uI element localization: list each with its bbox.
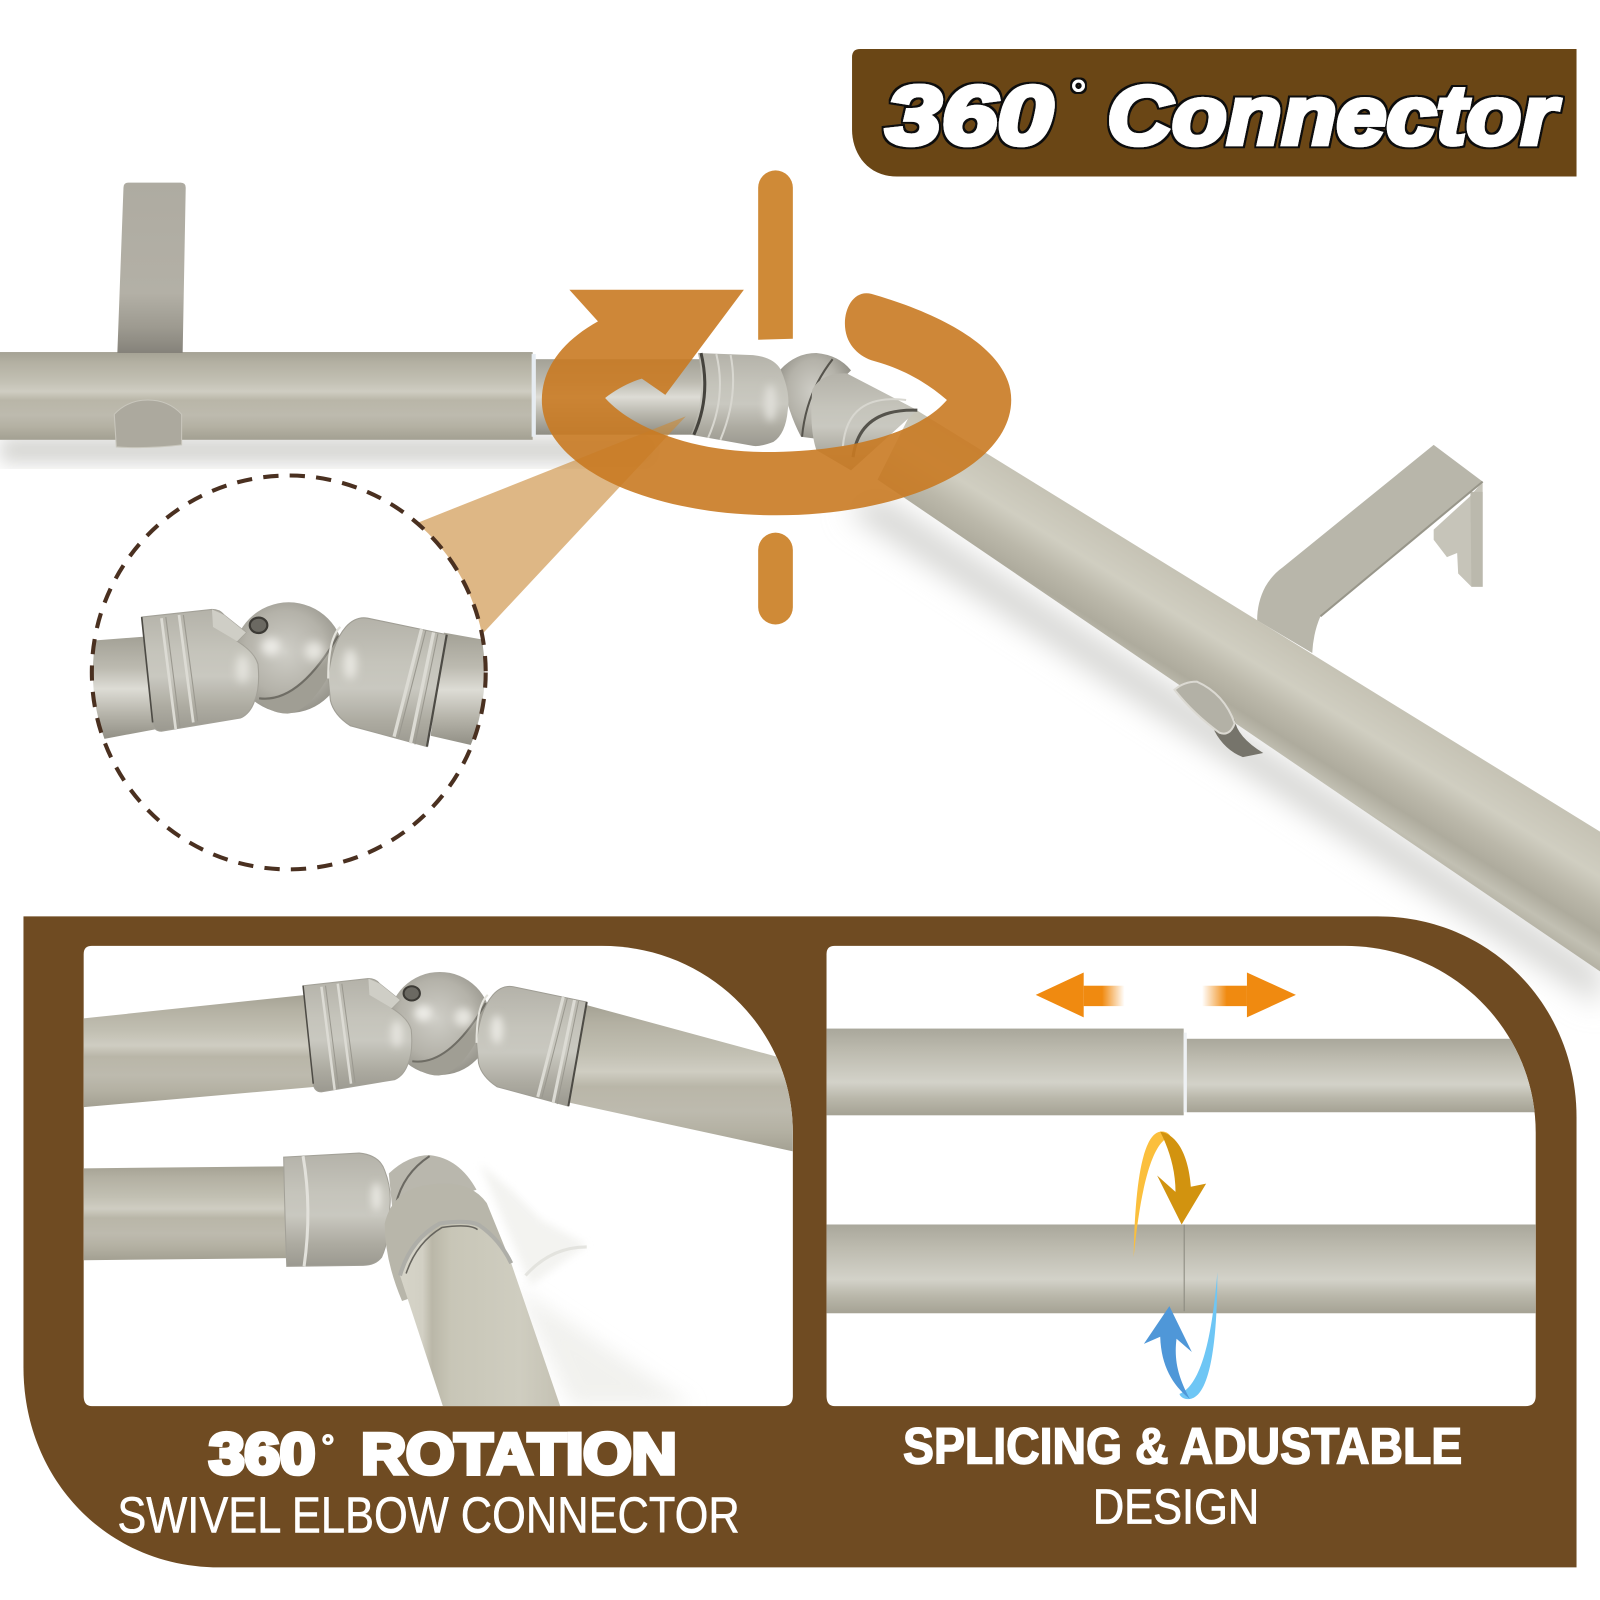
axis bar bottom [758,533,793,624]
title text: 360 [886,68,1053,162]
icon: 360 degree rotation swirl arrow [542,290,1011,515]
caption: 360 rotation heading: 360 [209,1422,315,1486]
upper bent rod with swivel [84,972,801,1153]
caption: 360 rotation heading [209,1422,677,1486]
motion blur ghost [486,1173,675,1406]
title text: ° [1068,71,1085,117]
lower elbow rod [84,1153,560,1406]
arrow: stretch right [1202,972,1296,1017]
caption: swivel elbow connector: SWIVEL ELBOW CONNECTOR [117,1487,740,1544]
icon: top wall bracket [117,183,186,353]
right diagonal curtain rod [878,408,1600,971]
left curtain rod [0,352,709,440]
title text: Connector [1107,68,1561,162]
axis bar top [758,170,793,340]
callout wedge [418,416,686,635]
caption: 360 rotation heading: ROTATION [361,1422,677,1486]
arrow: stretch left [1036,972,1124,1017]
panel: telescoping rods [827,946,1539,1406]
arrow: rotate yellow [1134,1131,1206,1257]
joined rod [827,1224,1537,1313]
rod shadow [0,437,1600,1005]
icon: diagonal rod knob [1174,682,1263,757]
title text [886,68,1561,162]
inset connector photo [90,602,490,747]
bottom brown panel [23,916,1577,1567]
caption: design: DESIGN [1093,1480,1259,1534]
extended rod [827,1029,1539,1115]
title banner [852,49,1577,177]
zoom circle inset [90,476,490,869]
icon: rod clip knob [114,400,182,448]
panel: swivel elbow photos [84,946,801,1406]
main swivel connector [691,353,917,470]
caption: splicing and adjustable: SPLICING & ADUSTABLE [903,1417,1462,1474]
inner thin rod [536,359,709,435]
caption: 360 rotation heading: ° [321,1427,334,1464]
icon: diagonal bracket [1257,445,1483,653]
arrow: rotate blue [1144,1272,1217,1399]
